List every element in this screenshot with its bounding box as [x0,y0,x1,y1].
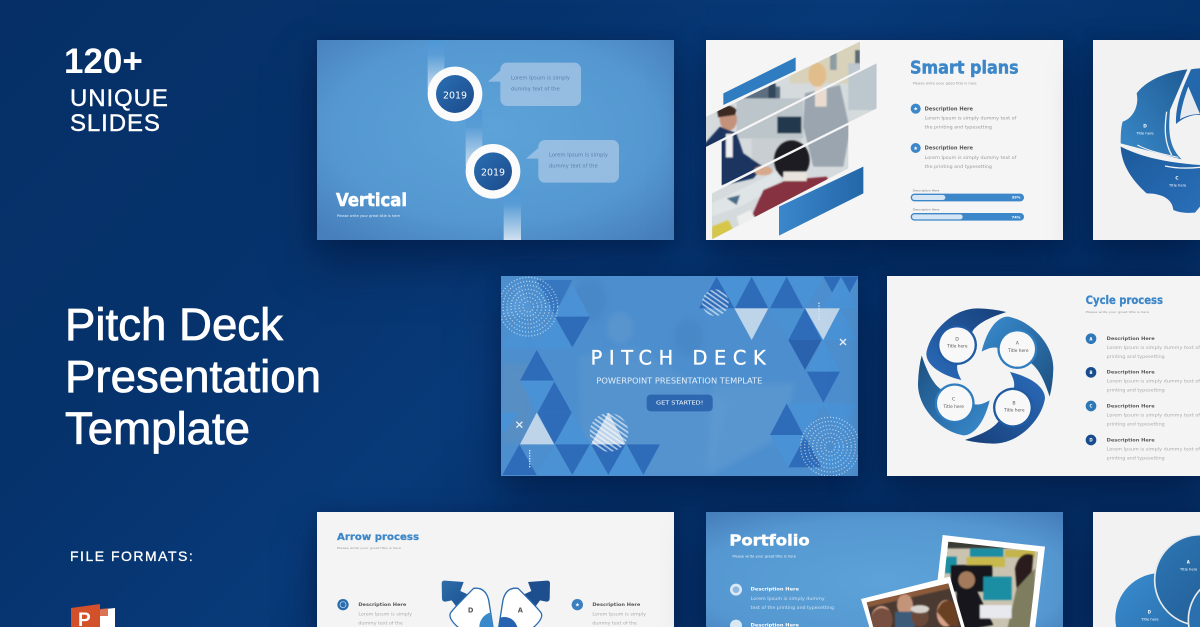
label unique slides: UNIQUE [70,85,169,112]
arrow D: D [468,607,474,615]
main title [65,299,321,454]
subheading: Please write your great title is here [732,554,796,558]
swoosh B: B [1012,400,1016,406]
heading: Smart plans [910,58,1019,78]
item D: Description Here [1107,437,1155,443]
swoosh C [918,355,990,435]
heading: Arrow process [337,532,419,543]
description item 1: Lorem Ipsum is simply dummy text of [925,116,1017,122]
swoosh C: C [952,397,955,403]
subheading: Please write your great title is here [337,546,401,550]
callout 1: Lorem Ipsum is simply [511,75,570,81]
callout 2: Lorem Ipsum is simply [549,152,608,158]
dotted circles [499,277,859,476]
swoosh D [926,308,1006,380]
item 1 [730,584,835,610]
arrow A: A [518,607,524,615]
subheading: Please write your good title is here [913,81,977,85]
item C: Lorem Ipsum is simply dummy text of [1107,413,1200,418]
description item 2: Lorem Ipsum is simply dummy text of [925,155,1017,161]
circle A: A [1187,560,1191,565]
segment D: D [1143,124,1147,130]
year node 1: 2019 [443,90,467,101]
item C: Description Here [1107,403,1155,409]
description item 1: Description Here [925,106,974,112]
item 1: Lorem Ipsum is simply dummy [751,596,825,601]
item 2 [730,620,799,627]
slide title: Vertical [336,191,407,211]
description item 2: ★ [913,146,918,152]
panel: cover slide pitch deck [501,276,858,476]
year node 1 [428,67,482,121]
main title: Template [65,403,250,454]
segment D: Title here [1135,132,1154,136]
item D: D [1089,438,1093,443]
progress bar 74% [911,207,1024,221]
item A: printing and typesetting [1107,354,1165,359]
progress bar 74%: Description Here [913,207,940,211]
cycle diagram [918,308,1053,444]
icon: PowerPoint [71,604,115,627]
file formats label: FILE FORMATS: [70,548,194,564]
circle D: Title here [1140,617,1159,621]
swoosh B [965,372,1045,444]
polaroid photo 2 [861,576,970,627]
segment C: Title here [1168,183,1187,187]
swoosh D: D [955,336,959,342]
arrow A [498,580,550,627]
panel: portfolio slide [706,512,1063,627]
description item 2: Description Here [925,146,974,152]
panel: partial circle process slide [1093,40,1200,240]
segment A top [1176,68,1200,124]
panel: cycle process slide [887,276,1200,476]
circle D: D [1148,609,1152,614]
swoosh B: Title here [1003,408,1025,414]
progress bar 39%: 39% [1012,196,1021,200]
item B: B [1089,370,1093,375]
segment C: C [1175,175,1179,181]
number 120+: 120+ [64,42,143,81]
right item [572,599,647,625]
year node 2: 2019 [481,168,505,179]
item D [1086,435,1200,460]
cover title: PITCH DECK [591,347,767,370]
description item 2 [911,143,1017,170]
callout 1 [488,63,581,106]
item B: Lorem Ipsum is simply dummy text of [1107,379,1200,384]
item 1: text of the printing and typesetting [751,605,835,610]
description item 1 [911,104,1017,131]
cross marks [516,303,846,468]
segment D [1121,69,1187,159]
hatched circles [590,289,729,452]
swoosh A [982,317,1053,397]
right item: ★ [575,603,580,609]
swoosh C: Title here [942,404,964,410]
panel: smart plans slide [706,40,1063,240]
circle A: Title here [1179,568,1198,572]
slide subtitle: Please write your great title is here [337,214,400,218]
progress bar 39%: Description Here [913,188,940,192]
button get started [647,395,713,411]
item D: Lorem Ipsum is simply dummy text of [1107,446,1200,451]
description item 1: the printing and typesetting [925,125,992,131]
panel: partial venn diagram slide [1093,512,1200,627]
heading: Cycle process [1086,293,1163,307]
panel: vertical timeline slide [317,40,674,240]
main title: Presentation [65,351,321,402]
main title: Pitch Deck [65,299,283,350]
decorative blue bars [723,57,863,236]
item B: printing and typesetting [1107,388,1165,393]
item C: printing and typesetting [1107,422,1165,427]
item A [1086,333,1200,359]
item A: A [1089,336,1093,341]
polaroid photo 1 [932,535,1045,627]
cover subtitle: POWERPOINT PRESENTATION TEMPLATE [596,377,762,386]
year node 2 [466,144,520,199]
photo strips: meeting [703,40,880,240]
swoosh A: Title here [1007,348,1029,354]
item C: C [1090,404,1093,409]
left item: dummy text of the [358,620,404,625]
circle overlap outline [1188,575,1200,627]
progress bar 39% [911,188,1024,201]
item B [1086,367,1200,393]
triangle pattern [501,277,858,475]
item A: Description Here [1107,336,1155,342]
item A: Lorem Ipsum is simply dummy text of [1107,345,1200,350]
right item: Lorem Ipsum is simply [592,611,647,616]
description item 2: the printing and typesetting [925,164,992,170]
progress bar 74%: 74% [1012,215,1021,219]
label unique slides [70,85,169,137]
description item 1: ★ [913,107,918,113]
panel: arrow process slide [317,512,674,627]
label unique slides: SLIDES [70,110,161,137]
button get started: GET STARTED! [656,401,703,407]
left item: Lorem Ipsum is simply [358,611,413,616]
callout 1: dummy text of the [511,87,560,93]
segment C [1121,147,1200,213]
faded team photo [502,278,795,476]
swoosh A: A [1016,340,1020,346]
item C [1086,401,1200,427]
callout 2 [526,140,619,183]
callout 2: dummy text of the [549,163,598,169]
item 1: Description Here [751,586,799,592]
circle D [1115,573,1200,627]
subheading: Please write your great title is here [1086,310,1149,314]
heading: Portfolio [729,532,810,550]
left item: Description Here [358,602,406,608]
item D: printing and typesetting [1107,455,1165,460]
heading: 120+ unique slides [64,42,169,137]
circle A [1155,535,1200,625]
left item [337,599,413,625]
right item: dummy text of the [592,620,638,625]
arrow D [442,580,494,627]
item B: Description Here [1107,370,1155,376]
swoosh D: Title here [946,344,968,350]
right item: Description Here [592,602,640,608]
